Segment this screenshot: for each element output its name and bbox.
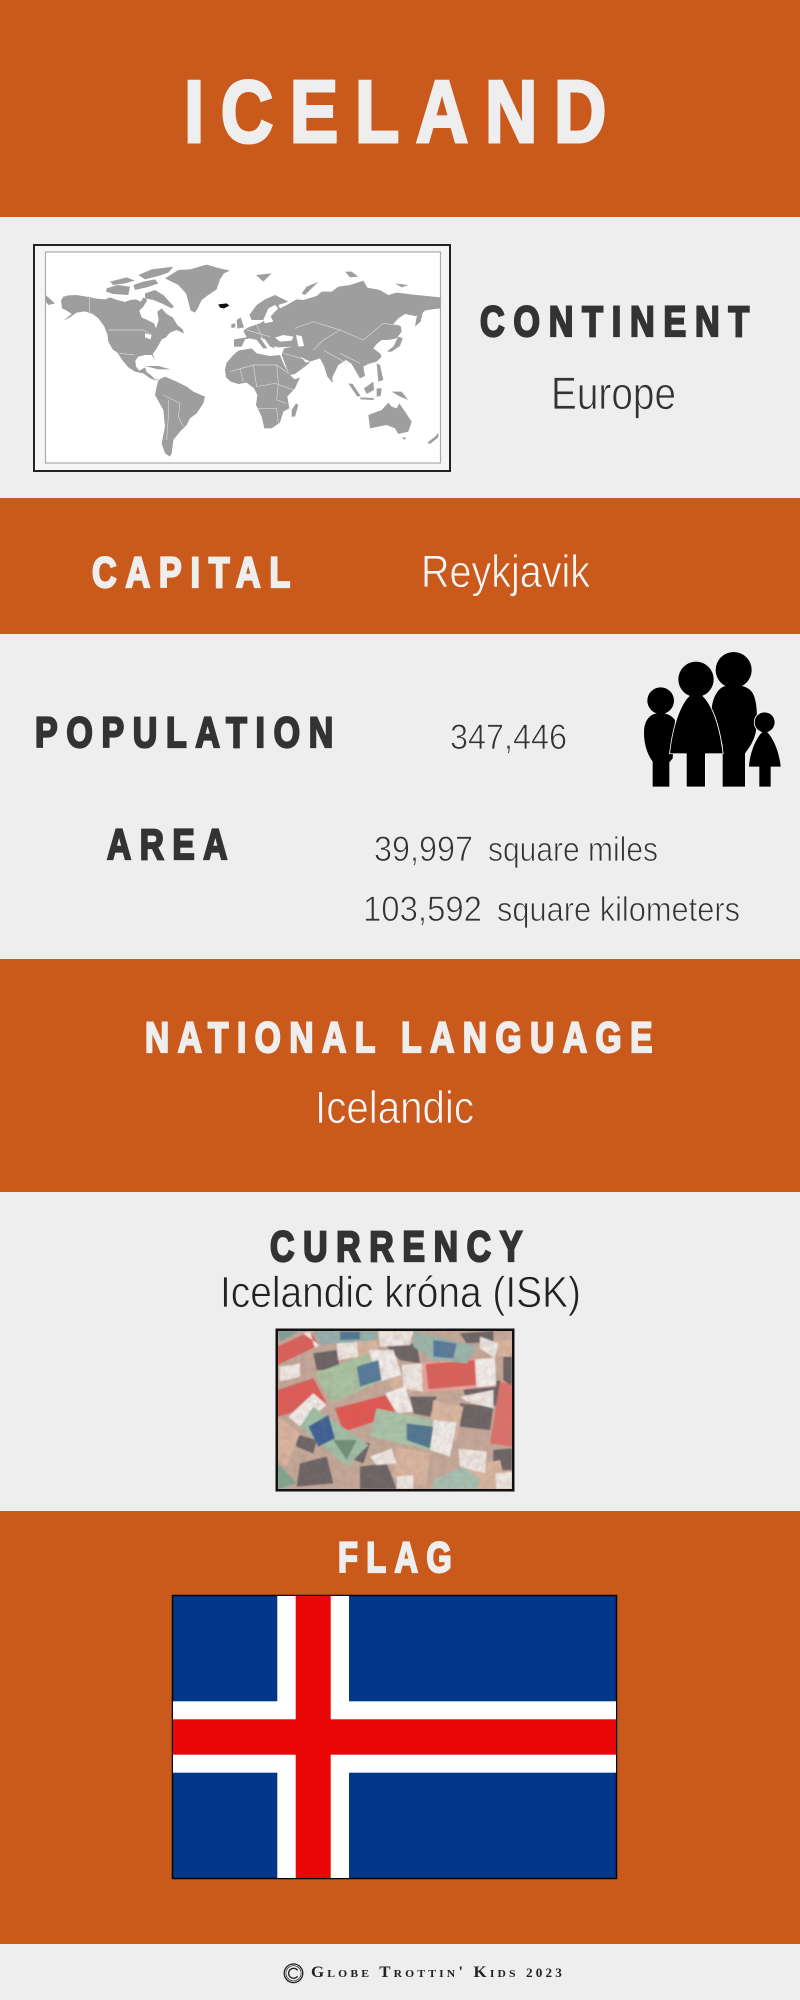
heading: currency: CURRENCY: [270, 1223, 531, 1271]
photo: Icelandic banknotes: [276, 1330, 514, 1490]
value: area in square kilometers: 103,592: [363, 890, 482, 929]
value: area in square kilometers: square kilometers: [497, 891, 740, 929]
panel: population and area: [0, 634, 800, 959]
title: ICELAND: [184, 62, 623, 161]
icon: family silhouette: [644, 652, 781, 787]
heading: national language: NATIONAL LANGUAGE: [145, 1014, 661, 1062]
value: national language: Icelandic: [315, 1082, 474, 1133]
value: area in square kilometers: [363, 890, 740, 929]
value: capital: Reykjavik: [421, 546, 590, 597]
icon: Iceland highlighted: [218, 303, 229, 308]
world map with Iceland highlighted: [34, 245, 450, 471]
value: area in square miles: square miles: [488, 831, 658, 869]
heading: flag: FLAG: [338, 1534, 460, 1582]
value: population: 347,446: [450, 718, 567, 757]
value: currency: Icelandic króna (ISK): [220, 1268, 581, 1317]
panel: continent: [0, 217, 800, 498]
icon: copyright symbol: [284, 1964, 303, 1983]
panel: capital: [0, 498, 800, 634]
heading: capital: CAPITAL: [92, 549, 299, 597]
panel: title band: [0, 0, 800, 217]
value: continent: Europe: [551, 368, 676, 419]
flag of Iceland: [172, 1596, 616, 1878]
panel: flag: [0, 1511, 800, 1944]
value: area in square miles: 39,997: [374, 830, 473, 869]
heading: population: POPULATION: [35, 709, 342, 757]
panel: currency: [0, 1192, 800, 1511]
value: area in square miles: [374, 830, 658, 869]
heading: area: AREA: [107, 821, 236, 869]
panel: national language: [0, 959, 800, 1192]
footer credit: Globe Trottin' Kids 2023: [311, 1964, 565, 1981]
panel: footer: [0, 1944, 800, 2000]
